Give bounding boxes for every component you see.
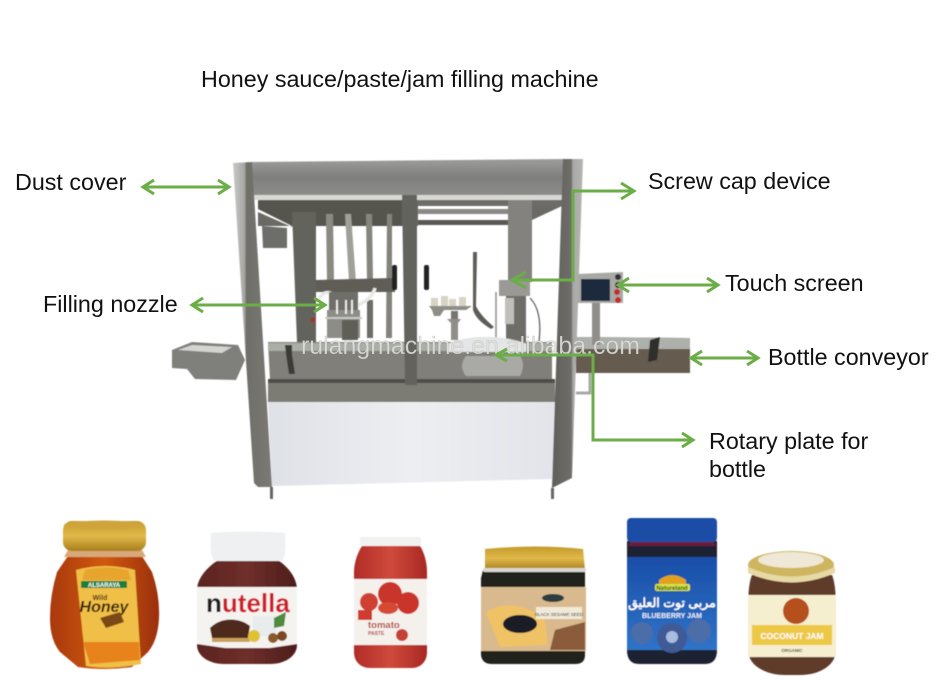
interior right column (508, 200, 532, 282)
bottle conveyor and belly (268, 342, 552, 380)
label: dust cover: Dust cover (15, 169, 127, 195)
light strip under hood (254, 195, 562, 200)
label: rotary plate for bottle: Rotary plate for (709, 428, 868, 454)
small control box (262, 226, 287, 248)
jar: blueberry jam: BLUEBERRY JAM (642, 613, 702, 620)
jar: honey (50, 520, 159, 669)
jar: blueberry jam: مربى توت العليق (628, 596, 716, 611)
jar: honey: ALSARAYA (88, 583, 121, 589)
filling machine (172, 159, 690, 499)
jar: blueberry jam: Natureland (656, 586, 688, 592)
jar: honey: Wild (93, 595, 107, 602)
arrow: rotary plate (496, 349, 693, 447)
watermark: rulangmachine.en.alibaba.com (301, 332, 640, 360)
label: rotary plate for bottle: bottle (709, 456, 766, 482)
right conveyor (576, 337, 690, 373)
label: bottle conveyor: Bottle conveyor (768, 344, 929, 370)
jar: nutella (197, 532, 297, 664)
arrow: bottle conveyor (691, 351, 758, 365)
discharge tray left (172, 342, 245, 380)
jar: coconut jam (748, 551, 836, 675)
arrow: filling nozzle (192, 298, 325, 312)
right post (552, 159, 583, 488)
jar: honey: Honey (80, 599, 130, 616)
jar: black sesame spread (481, 546, 586, 664)
arrow: dust cover (143, 180, 229, 194)
feet (270, 487, 554, 499)
arrow: screw cap device (512, 183, 634, 288)
lower white cabinet panel (268, 402, 555, 486)
top hood (252, 159, 564, 195)
left post (233, 162, 272, 487)
arrow: touch screen (618, 278, 718, 292)
filling nozzle assembly (310, 214, 429, 340)
label: filling nozzle: Filling nozzle (43, 291, 178, 317)
jar: coconut jam: ORGANIC (781, 648, 803, 653)
jar: tomato paste (354, 537, 427, 668)
cap rotary feeder (429, 252, 496, 340)
jar: black sesame spread: BLACK SESAME SEED (535, 612, 584, 617)
label: screw cap device: Screw cap device (648, 168, 831, 194)
center door post (402, 195, 417, 385)
jar: blueberry jam (627, 518, 717, 664)
title: Honey sauce/paste/jam filling machine (201, 66, 599, 92)
jar: tomato paste: tomato (368, 620, 400, 631)
screw cap head (499, 280, 540, 342)
jar: coconut jam: COCONUT JAM (760, 631, 824, 641)
jar: tomato paste: PASTE (368, 631, 385, 637)
label: touch screen: Touch screen (725, 270, 864, 296)
touch screen (578, 272, 623, 345)
interior dark top band (258, 199, 562, 227)
jar: nutella: nutella (206, 588, 290, 618)
interior left column (292, 212, 316, 342)
